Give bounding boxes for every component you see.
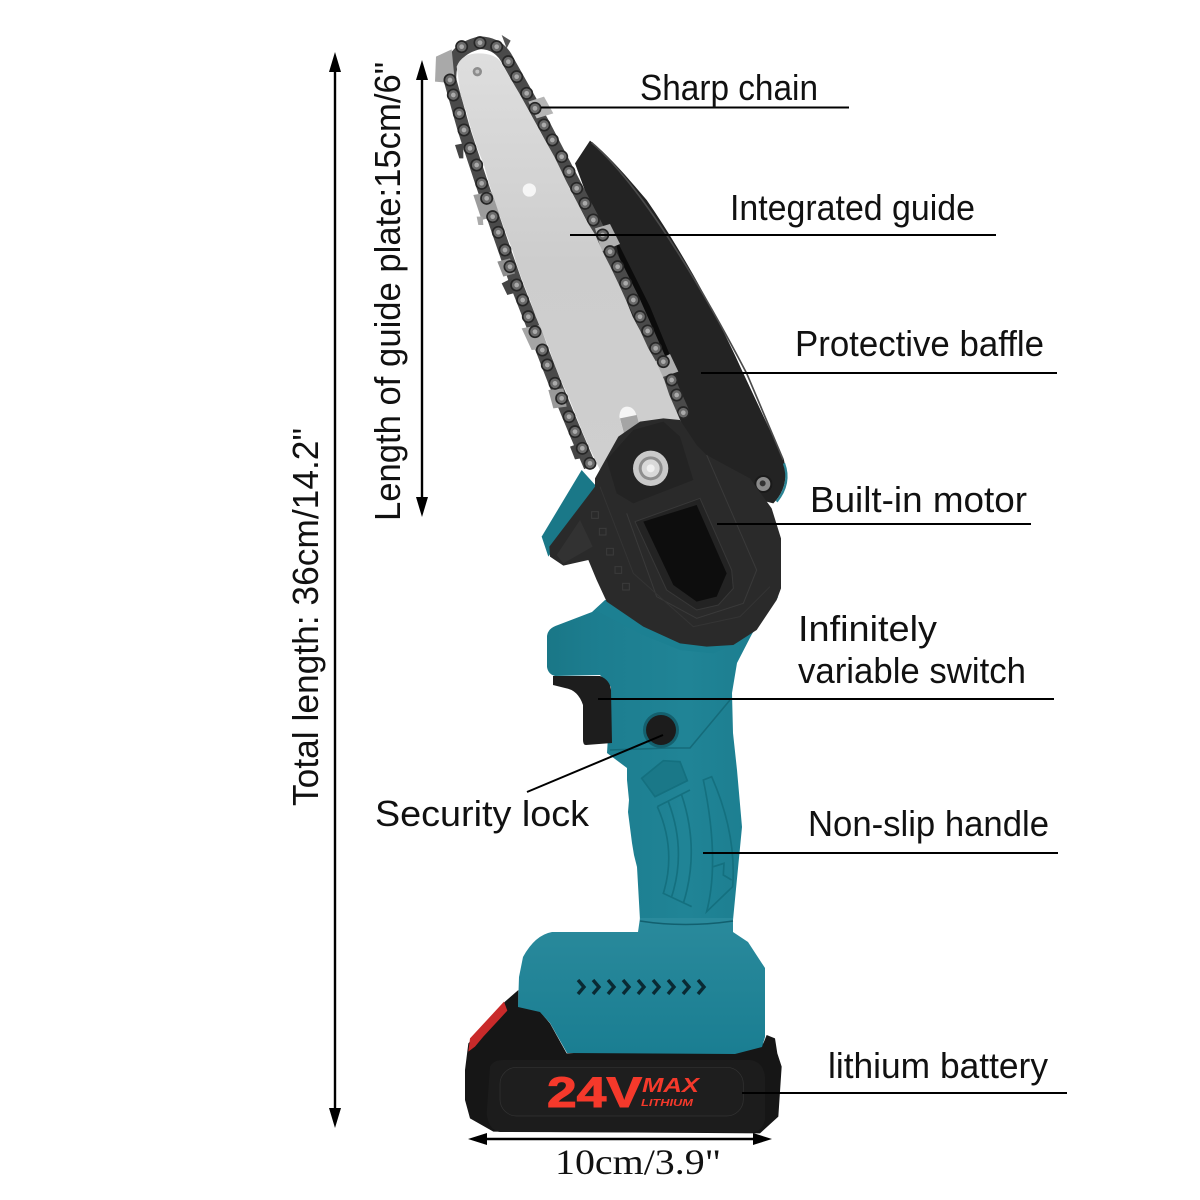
battery voltage label: LITHIUM	[641, 1098, 694, 1109]
dimension: total length	[285, 52, 341, 1128]
callout: integrated guide: Integrated guide	[730, 187, 975, 228]
security lock button	[643, 712, 679, 748]
bolt	[633, 451, 668, 486]
dimension: width	[468, 1133, 772, 1182]
exhaust vents	[578, 980, 704, 994]
sharp chain	[435, 35, 689, 469]
callout: lithium battery: lithium battery	[828, 1045, 1048, 1086]
callout: infinitely variable switch: Infinitely	[798, 608, 937, 649]
dimension: total length: Total length: 36cm/14.2"	[285, 428, 326, 806]
callout: infinitely variable switch	[598, 608, 1054, 699]
teal handle body	[518, 597, 778, 1054]
battery voltage label: 24V	[547, 1069, 642, 1117]
dimension: guide plate length	[367, 60, 428, 521]
battery voltage label: MAX	[642, 1075, 701, 1097]
trigger switch	[553, 676, 612, 745]
callout: protective baffle: Protective baffle	[795, 323, 1044, 364]
callout: infinitely variable switch: variable switch	[798, 650, 1026, 691]
protective baffle	[575, 141, 786, 503]
callout: non-slip handle: Non-slip handle	[808, 803, 1049, 844]
battery pack	[465, 990, 782, 1133]
callout: built-in motor: Built-in motor	[810, 479, 1027, 520]
saw blade assembly	[435, 35, 786, 503]
battery mount base	[518, 918, 765, 1054]
battery voltage label	[547, 1069, 701, 1117]
callout: security lock: Security lock	[375, 793, 590, 834]
callout: security lock	[375, 735, 663, 834]
guide bar	[457, 53, 682, 470]
dimension: guide plate length: Length of guide plate:15cm/6"	[367, 62, 408, 521]
dimension: width: 10cm/3.9"	[555, 1142, 721, 1182]
motor housing	[542, 418, 781, 653]
handle grip lines	[642, 761, 733, 912]
callout: sharp chain: Sharp chain	[640, 67, 818, 108]
